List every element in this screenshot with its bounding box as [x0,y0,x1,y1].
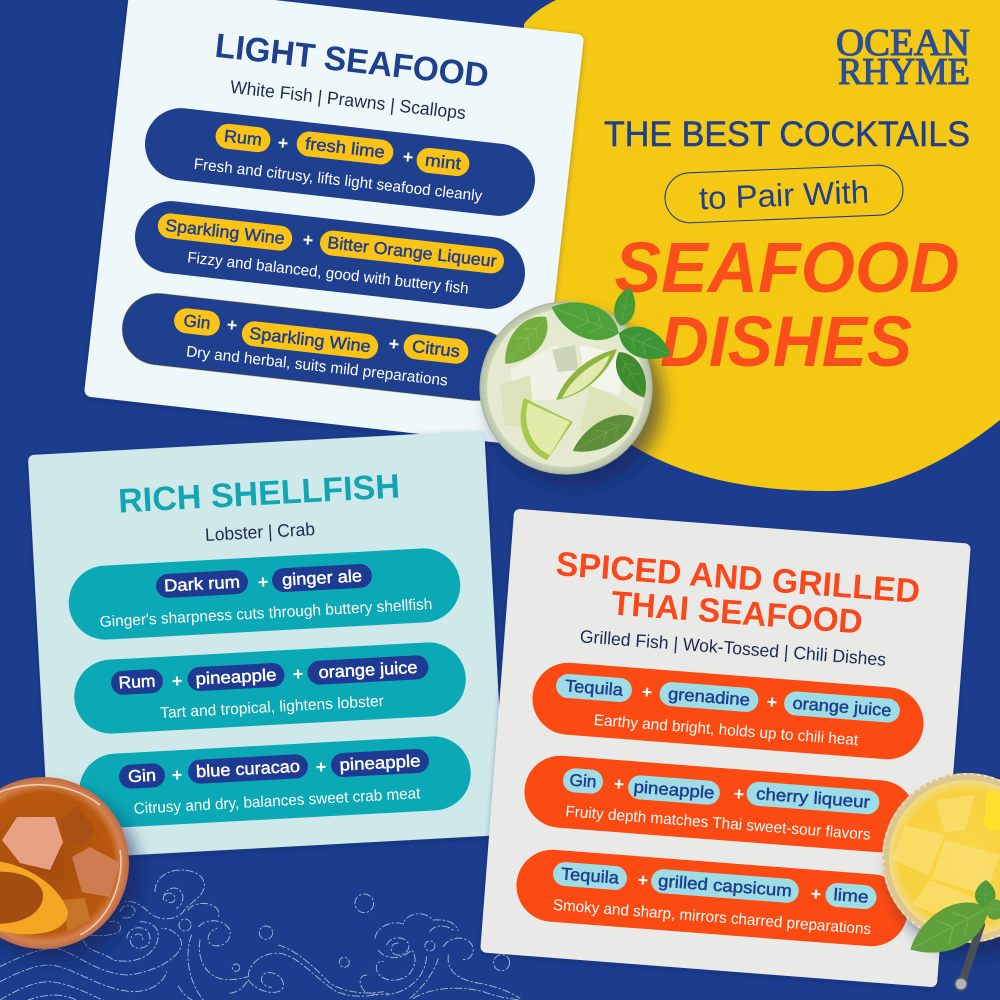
plus: + [277,132,289,154]
icon: orange negroni glass [0,777,129,949]
description: Fizzy and balanced, good with buttery fish [186,249,470,298]
plus: + [402,146,414,168]
description: Citrusy and dry, balances sweet crab meat [133,785,421,818]
chip: blue curacao [187,754,309,784]
plus: + [641,682,653,702]
chip: orange juice: orange juice [318,658,418,682]
description: Fruity depth matches Thai sweet-sour flavors [565,803,871,844]
pill: rum pineapple orange juice [72,640,468,736]
plus: + [733,784,745,804]
chip: dark rum: Dark rum [164,572,240,596]
heading: spiced and grilled: SPICED AND GRILLED [555,545,921,611]
heading: thai seafood: THAI SEAFOOD [610,584,864,642]
chip: pineapple: pineapple [339,751,421,775]
chip: tequila: Tequila [564,676,624,700]
pill: gin blue curacao pineapple [77,734,473,830]
description: Smoky and sharp, mirrors charred preparations [552,897,872,938]
chip: dark rum [155,570,249,598]
plus: + [292,664,304,684]
chip: bitter orange liqueur: Bitter Orange Liqueur [326,233,498,271]
subheading: thai types: Grilled Fish | Wok-Tossed | Chili Dishes [579,626,887,670]
chip: gin: Gin [128,766,156,786]
plus: + [637,870,649,890]
plus: + [766,692,778,712]
chip: gin [173,307,221,337]
chip: grenadine [659,681,759,713]
badge: to pair with [664,164,904,224]
chip: rum [110,669,164,695]
panel: spiced and grilled thai seafood [480,509,971,987]
plus: + [226,314,238,336]
straw [962,925,981,983]
chip: cherry liqueur: cherry liqueur [755,784,871,812]
chip: grenadine: grenadine [667,684,751,710]
chip: gin: Gin [183,311,211,333]
chip: gin [118,763,166,789]
chip: gin [562,768,604,794]
chip: tequila [552,861,628,891]
chip: mint [415,147,471,177]
chip: lime [825,882,877,910]
chip: gin: Gin [569,770,597,792]
chip: cherry liqueur [746,781,880,815]
chip: fresh lime: fresh lime [304,134,386,162]
description: Dry and herbal, suits mild preparations [185,343,449,390]
chip: rum: Rum [223,126,263,150]
logo: ocean rhyme: RHYME [838,51,970,93]
plus: + [613,774,625,794]
chip: blue curacao: blue curacao [196,757,300,781]
pill: rum lime mint [141,104,539,220]
decorative wave stitching [0,870,520,1000]
plus: + [171,765,183,785]
pill: sparkling orange [131,197,529,313]
pill: gin sparkling citrus [118,289,516,405]
icon: pineapple cocktail glass [882,773,1000,990]
pill: dark rum ginger ale [67,546,462,642]
chip: mint: mint [424,151,462,173]
plus: + [257,572,269,592]
chip: sparkling wine [157,212,293,252]
chip: pineapple [187,662,285,692]
plus: + [810,884,822,904]
plus: + [302,229,314,251]
subheading: light seafood types: White Fish | Prawns | Scallops [229,77,467,123]
title: dishes: DISHES [660,303,912,382]
heading: light seafood: LIGHT SEAFOOD [213,27,491,95]
plus: + [171,671,183,691]
chip: pineapple [627,775,721,805]
chip: grilled capsicum [650,868,800,904]
chip: rum [214,123,272,153]
chip: orange juice [307,655,429,685]
title: the best cocktails: THE BEST COCKTAILS [604,115,970,154]
description: Ginger's sharpness cuts through buttery shellfish [99,596,433,631]
plus: + [388,333,400,355]
chip: pineapple: pineapple [633,777,715,803]
pill: gin pineapple cherry liqueur [522,753,918,855]
chip: grilled capsicum: grilled capsicum [657,871,793,901]
panel: rich shellfish [28,430,506,860]
chip: pineapple: pineapple [195,665,277,689]
chip: tequila [555,673,633,703]
chip: sparkling wine: Sparkling Wine [248,324,372,356]
chip: fresh lime [295,130,395,166]
chip: tequila: Tequila [560,864,620,888]
chip: sparkling wine [241,320,379,360]
chip: pineapple [330,748,430,778]
chip: citrus [402,333,470,365]
chip: sparkling wine: Sparkling Wine [164,216,286,248]
chip: ginger ale [271,563,373,593]
logo: ocean rhyme: OCEAN [836,22,970,64]
plus: + [315,757,327,777]
title: seafood: SEAFOOD [614,229,960,308]
pill: tequila grenadine orange juice [530,660,926,762]
description: Fresh and citrusy, lifts light seafood cleanly [193,156,483,205]
chip: citrus: Citrus [411,337,461,361]
description: Tart and tropical, lightens lobster [160,693,384,722]
panel: light seafood [84,0,584,447]
logo: ocean rhyme [836,22,970,93]
heading: rich shellfish: RICH SHELLFISH [117,467,401,521]
yellow header blob [520,0,1000,491]
chip: rum: Rum [118,672,156,692]
chip: lime: lime [833,885,869,907]
chip: orange juice: orange juice [792,694,892,720]
description: Earthy and bright, holds up to chili heat [593,712,859,749]
badge: to pair with: to Pair With [698,174,870,216]
pill: tequila capsicum lime [514,847,910,949]
chip: ginger ale: ginger ale [282,566,362,590]
subheading: shellfish types: Lobster | Crab [205,519,315,545]
icon: mojito glass [480,285,676,474]
chip: orange juice [783,691,901,723]
